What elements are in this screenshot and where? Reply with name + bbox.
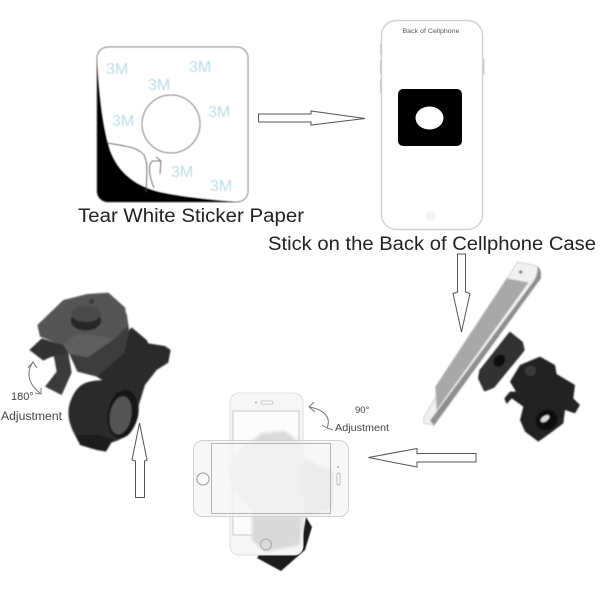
- earpiece: [519, 271, 522, 273]
- panel: mount with 180 degree adjustment: [29, 293, 171, 452]
- label: adjustment right: Adjustment: [335, 422, 389, 434]
- panel: back of cellphone: [380, 20, 484, 230]
- ghost mount lever: [303, 458, 333, 516]
- panel: phone rotation view: [194, 393, 348, 571]
- arrow: 180 degree rotation: [28, 362, 41, 394]
- clamp opening: [104, 387, 142, 441]
- mount head side: [68, 313, 129, 377]
- 3M labels: [106, 59, 232, 195]
- mount head top: [37, 293, 128, 357]
- black adhesive plate: [398, 89, 462, 146]
- 3M labels: 3M: [171, 164, 193, 181]
- clamp hinge: [76, 435, 113, 452]
- mount ring: [532, 405, 562, 435]
- 3M labels: 3M: [210, 178, 232, 195]
- centre circle: [142, 95, 200, 153]
- arrow: 90 degree rotation: [309, 402, 333, 430]
- 3M labels: 3M: [189, 59, 211, 76]
- landscape home button: [197, 473, 209, 485]
- arrow: left to rotation view: [368, 448, 476, 467]
- panel: phone and mount exploded view: [424, 262, 580, 442]
- phone body: [424, 262, 541, 425]
- mount: [504, 357, 580, 442]
- phone side band: [430, 266, 541, 425]
- head front facet: [62, 333, 115, 357]
- label: 90 degrees: 90°: [355, 405, 370, 416]
- adhesive plate: [479, 333, 523, 390]
- 3M labels: 3M: [208, 104, 230, 121]
- label: back of cellphone: Back of Cellphone: [402, 28, 460, 35]
- 3M labels: 3M: [112, 113, 134, 130]
- peeled black corner: [97, 58, 240, 202]
- upper prong: [29, 338, 68, 361]
- arrow: down to exploded view: [453, 254, 470, 332]
- caption: tear sticker: Tear White Sticker Paper: [78, 205, 304, 227]
- lower prong: [45, 353, 72, 395]
- knob: [71, 311, 101, 331]
- arrow: sticker to phone back: [258, 111, 365, 125]
- tear fold line: [107, 143, 147, 192]
- phone screen: [435, 278, 529, 410]
- mount beneath phones: [257, 517, 312, 571]
- rear clamp lever: [97, 327, 171, 407]
- label: 180 degrees: 180°: [11, 391, 34, 403]
- caption: stick on phone case: Stick on the Back of Cellphone Case: [268, 233, 596, 255]
- handlebar clamp ring: [68, 380, 139, 444]
- portrait phone speaker: [261, 401, 273, 404]
- plate hole: [491, 352, 508, 369]
- label: adjustment left: Adjustment: [1, 411, 63, 423]
- mount knob: [525, 365, 536, 376]
- arrow: up to mount: [132, 423, 147, 498]
- home button ghost: [426, 211, 436, 221]
- 3M labels: 3M: [106, 61, 128, 78]
- panel: 3M sticker sheet: [97, 47, 248, 202]
- ghost mount silhouette: [228, 431, 303, 552]
- portrait phone: [230, 393, 303, 555]
- landscape phone: [194, 440, 348, 516]
- 3M labels: 3M: [148, 77, 170, 94]
- plate hole: [416, 106, 444, 130]
- tear direction arrow: [150, 157, 161, 188]
- portrait phone home button: [260, 539, 272, 550]
- landscape speaker: [337, 473, 340, 485]
